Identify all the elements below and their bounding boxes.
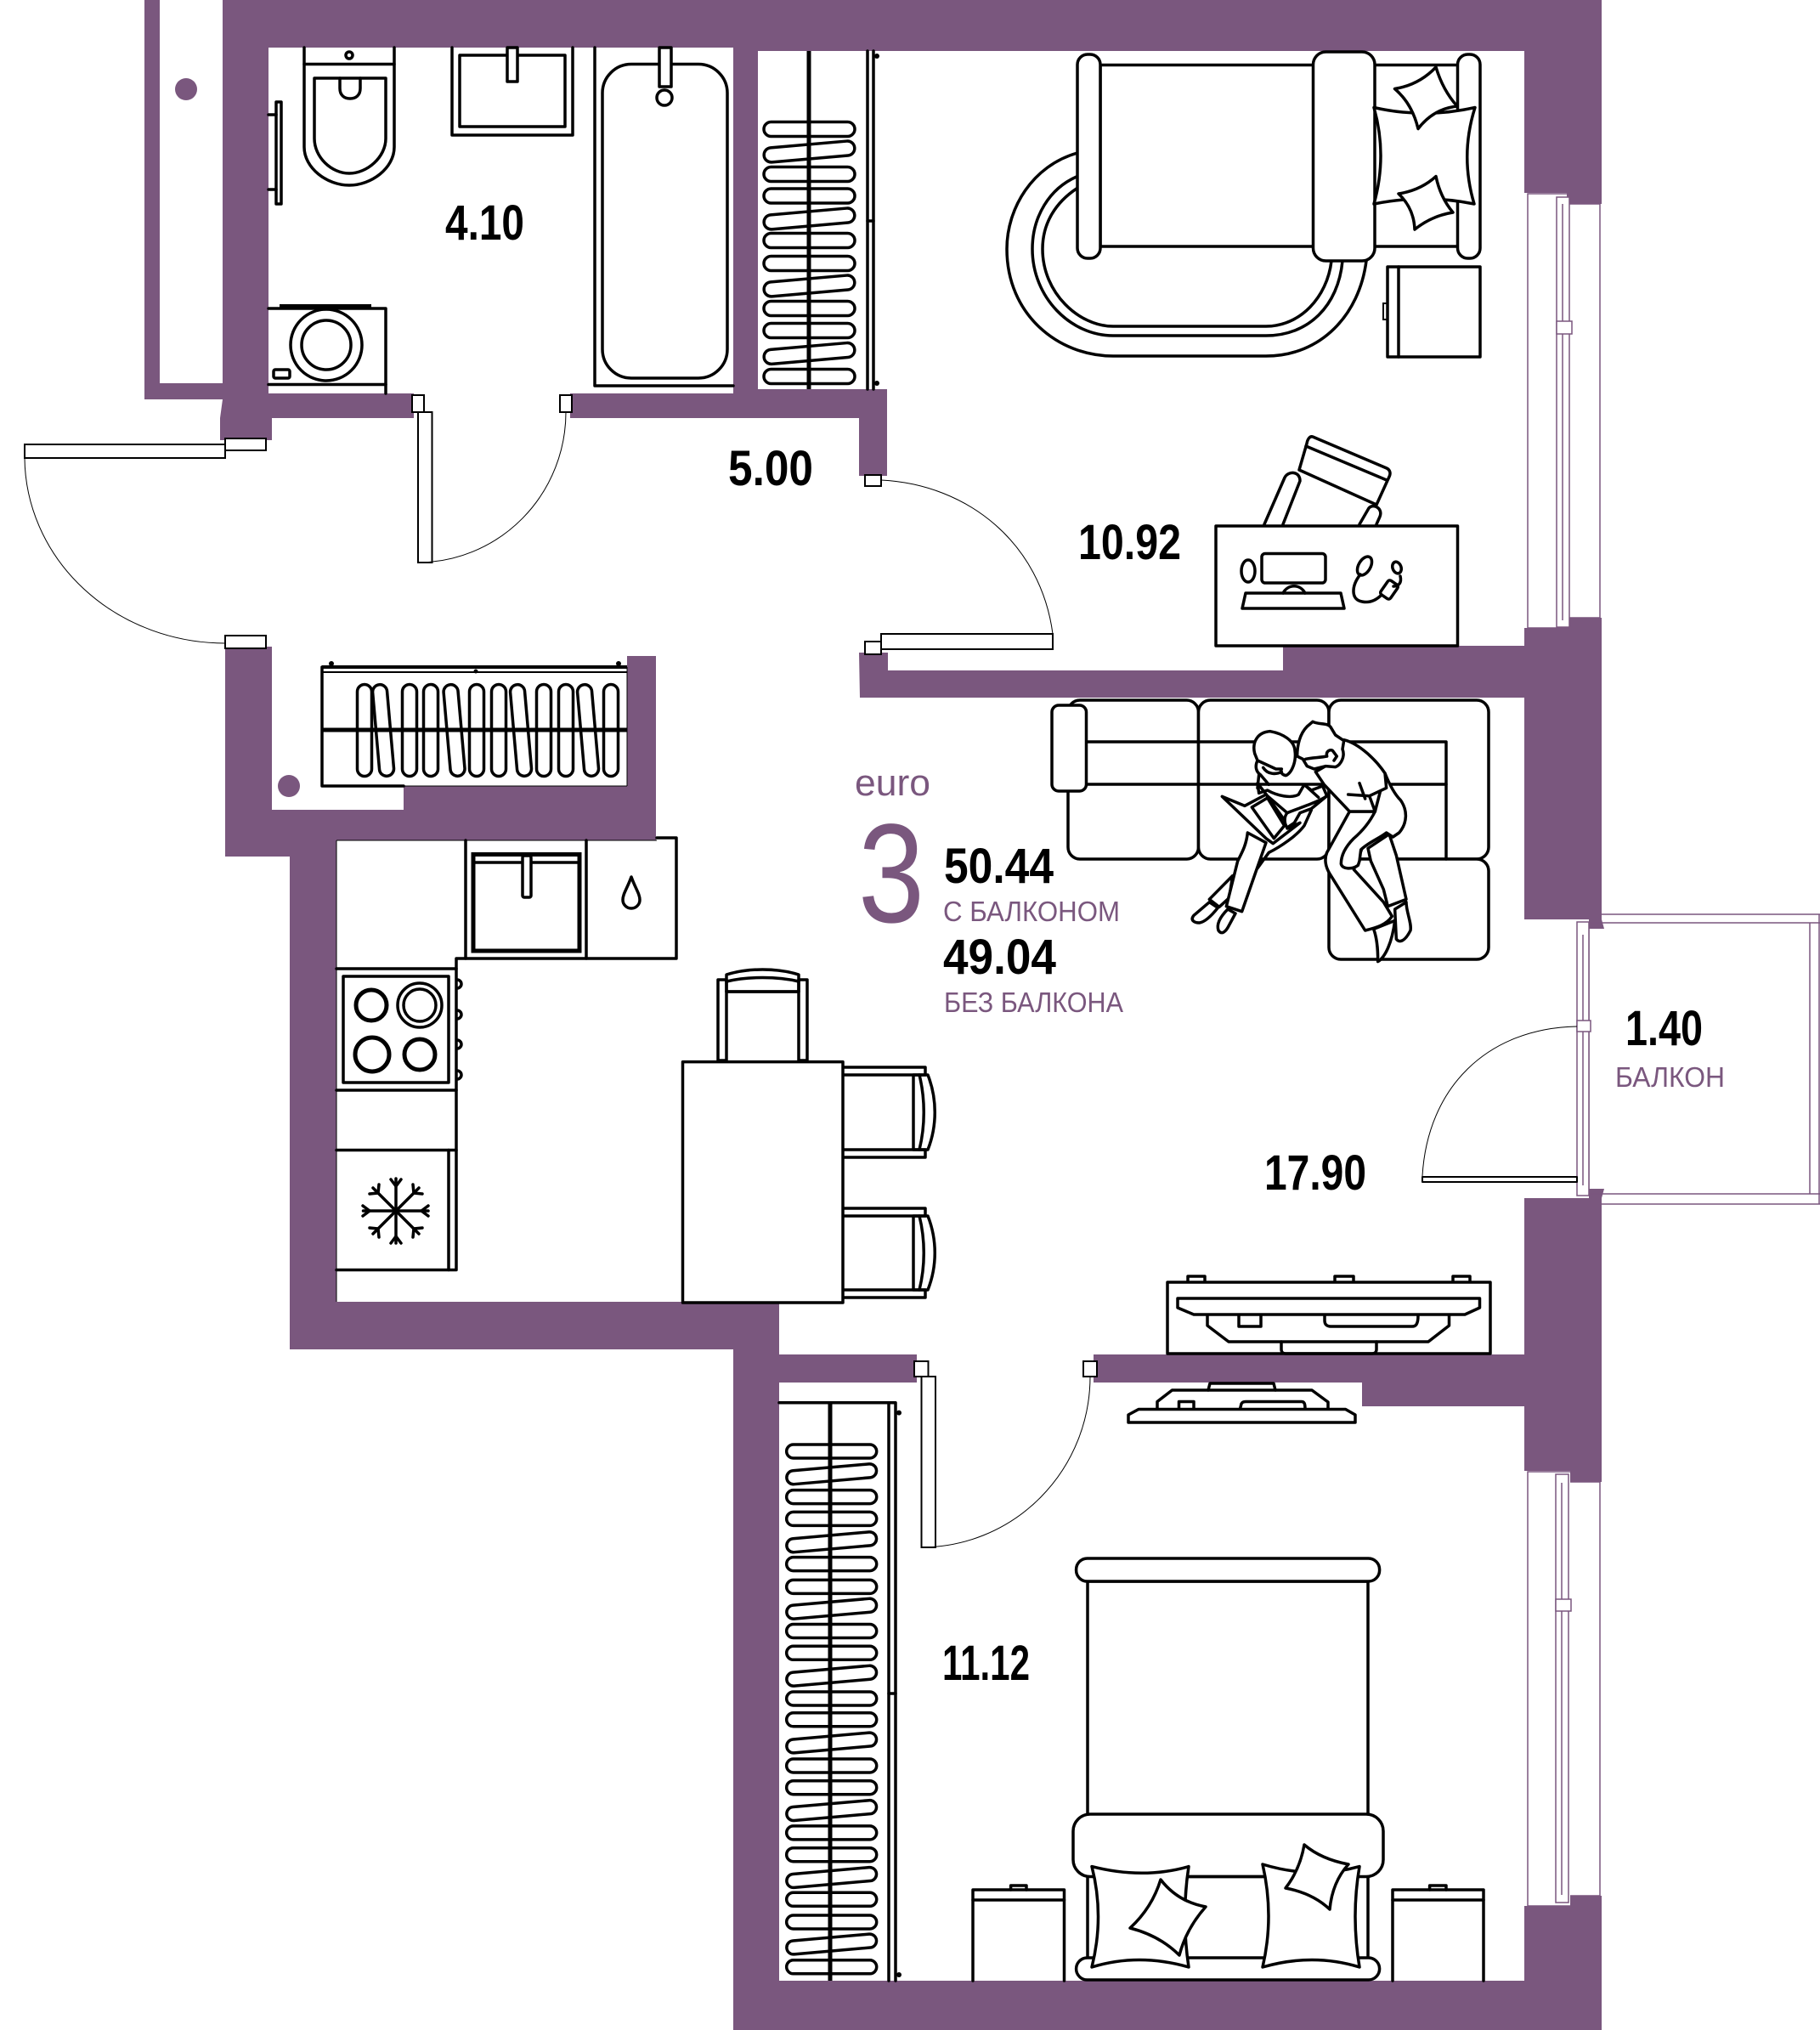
rug [1007,153,1366,356]
washing machine [268,304,386,393]
label: area living room: 17.90 [1264,1145,1366,1201]
label: area bedroom two: 11.12 [942,1636,1030,1691]
door: bedroom one [865,475,1053,654]
wardrobe: bedroom one [763,51,879,389]
man torso and head [1297,721,1405,868]
door: bedroom two [914,1361,1097,1547]
icon: shaft riser top [175,78,197,100]
label: area bedroom one: 10.92 [1078,515,1181,570]
total area without balcony: БЕЗ БАЛКОНА [944,987,1123,1018]
tv: bedroom two [1128,1383,1355,1422]
dining table [683,1062,843,1303]
door: entrance [25,438,266,648]
label: area bathroom: 4.10 [445,195,524,251]
refrigerator [336,1151,456,1269]
dining chair right lower [844,1208,935,1298]
bed: bedroom two [1073,1558,1383,1980]
nightstand: bedroom two left [973,1886,1064,1981]
wardrobe: hall [322,661,627,786]
icon: shaft riser hall [278,775,300,797]
office chair [1264,437,1390,524]
total area with balcony [943,839,1120,927]
wardrobe: bedroom two [779,1403,902,1981]
bed: bedroom one [1077,52,1480,261]
towel rail [268,102,281,204]
stove [336,969,461,1090]
window: bedroom one [1528,194,1600,628]
dining chair right upper [844,1067,935,1157]
people with laptop [1192,721,1410,962]
balcony door [1422,922,1591,1196]
label: area hall: 5.00 [728,441,813,496]
nightstand: bedroom one [1383,267,1480,357]
window: bedroom two [1528,1472,1600,1906]
flat type: rooms number: 3 [858,795,924,953]
icon: water drop [623,877,640,908]
total area with balcony: С БАЛКОНОМ [943,896,1120,927]
woman legs [1192,810,1311,933]
bathtub [595,48,733,386]
desk with computer [1216,526,1458,646]
woman head and torso [1222,732,1327,844]
toilet [304,48,394,185]
kitchen counter [336,838,676,1302]
total area with balcony: 50.44 [944,839,1054,894]
door: bathroom [412,395,572,563]
man legs [1325,811,1410,962]
bathroom sink [452,48,573,135]
balcony outline [1589,914,1820,1204]
sofa [1052,700,1489,959]
tv unit: living room [1167,1276,1490,1354]
label: balcony caption: БАЛКОН [1615,1061,1725,1093]
flat type: euro: euro [855,762,930,804]
nightstand: bedroom two right [1393,1886,1484,1981]
total area without balcony [943,930,1123,1018]
kitchen sink [473,855,579,951]
total area without balcony: 49.04 [943,930,1056,985]
dining chair top [718,970,807,1060]
label: area balcony: 1.40 [1625,1001,1703,1056]
